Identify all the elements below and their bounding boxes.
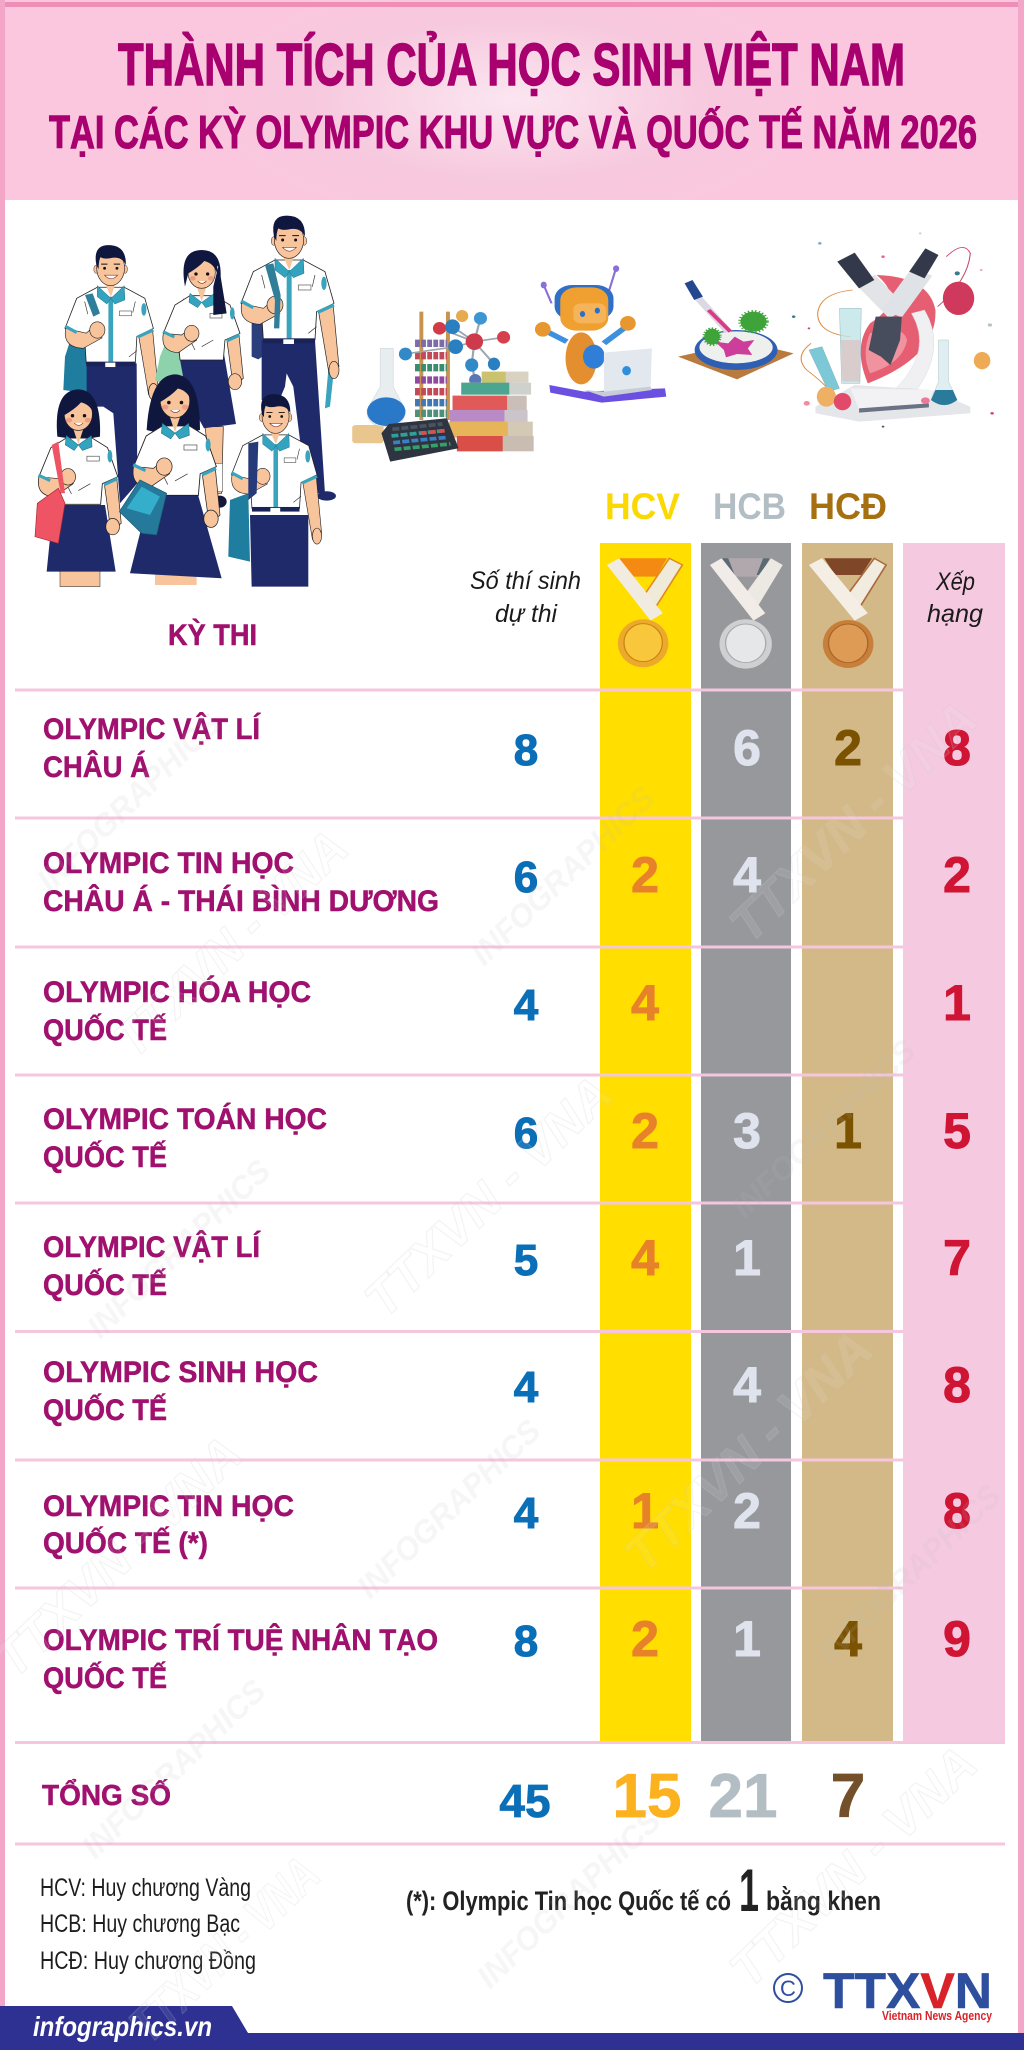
footnote: (*): Olympic Tin học Quốc tế có: [406, 1886, 731, 1916]
row: Olympic Toán học quốc tế: 3: [733, 1103, 761, 1159]
text: INFOGRAPHICS: [470, 1802, 668, 1995]
title banner: [0, 0, 1024, 200]
legend: medal abbreviations: HCĐ: Huy chương Đồng: [40, 1947, 256, 1975]
text: INFOGRAPHICS: [725, 1032, 923, 1225]
medal icons: [607, 558, 886, 669]
footer band with site name: infographics.vn: [33, 2011, 212, 2042]
row: Olympic Tin học châu Á - Thái Bình Dương: 2: [631, 847, 659, 903]
column header: rank: Xếp: [935, 568, 975, 596]
row: Olympic Hóa học quốc tế: QUỐC TẾ: [43, 1013, 167, 1047]
icon: bronze medal: [809, 558, 886, 668]
icon: petri dish and dropper: [678, 280, 794, 379]
student: girl front middle: [119, 374, 222, 585]
text: TTXVN - VNA: [104, 819, 358, 1068]
row: Olympic Trí tuệ nhân tạo quốc tế: 4: [834, 1611, 862, 1667]
footnote: 1: [739, 1857, 759, 1924]
row: Olympic Vật lí quốc tế: OLYMPIC VẬT LÍ: [43, 1230, 261, 1264]
row: Olympic Hóa học quốc tế: 4: [514, 981, 539, 1030]
column: gold medals background: [600, 543, 691, 1741]
text: INFOGRAPHICS: [350, 1412, 548, 1605]
illustrations: science subjects: [352, 232, 994, 462]
illustration: students group: [35, 216, 339, 587]
text: TTXVN - VNA: [354, 1065, 623, 1328]
row: Olympic Vật lí quốc tế: 7: [943, 1230, 971, 1286]
row: Olympic Toán học quốc tế: 6: [514, 1109, 538, 1158]
row: totals: 15: [613, 1762, 681, 1831]
row: Olympic Trí tuệ nhân tạo quốc tế: OLYMPIC TRÍ TUỆ NHÂN TẠO: [43, 1623, 438, 1657]
row: Olympic Vật lí châu Á: 8: [514, 726, 538, 775]
row: Olympic Toán học quốc tế: QUỐC TẾ: [43, 1140, 167, 1174]
column header: rank: hạng: [927, 600, 983, 628]
text: TTXVN - VNA: [119, 1846, 330, 2050]
text: INFOGRAPHICS: [810, 1477, 1008, 1670]
column: bronze medals background: [802, 543, 893, 1741]
row: totals: 21: [709, 1762, 777, 1831]
text: TTXVN - VNA: [719, 1735, 988, 1998]
row: Olympic Tin học châu Á - Thái Bình Dương: OLYMPIC TIN HỌC: [43, 847, 294, 880]
row: Olympic Tin học quốc tế: OLYMPIC TIN HỌC: [43, 1490, 294, 1523]
row: Olympic Tin học quốc tế: 4: [514, 1489, 539, 1538]
row: Olympic Trí tuệ nhân tạo quốc tế: [43, 1611, 971, 1695]
row: Olympic Hóa học quốc tế: OLYMPIC HÓA HỌC: [43, 975, 311, 1009]
column: ranking background: [903, 543, 1005, 1744]
student: girl back middle: [155, 250, 243, 508]
row: Olympic Hóa học quốc tế: 1: [943, 975, 971, 1031]
row: Olympic Tin học quốc tế: 2: [733, 1483, 761, 1539]
row: Olympic Sinh học quốc tế: 8: [943, 1357, 971, 1413]
heading: medal abbreviations: [605, 486, 887, 527]
row: Olympic Hóa học quốc tế: 4: [631, 975, 659, 1031]
row: Olympic Toán học quốc tế: [43, 1102, 971, 1174]
row: Olympic Toán học quốc tế: OLYMPIC TOÁN HỌC: [43, 1102, 327, 1136]
row: Olympic Sinh học quốc tế: OLYMPIC SINH HỌC: [43, 1356, 318, 1389]
footnote: bằng khen: [766, 1885, 881, 1916]
row: Olympic Sinh học quốc tế: 4: [733, 1357, 761, 1413]
row: Olympic Hóa học quốc tế: [43, 975, 971, 1047]
row: Olympic Vật lí châu Á: 8: [943, 720, 971, 776]
row: Olympic Vật lí quốc tế: 1: [733, 1230, 761, 1286]
row: Olympic Sinh học quốc tế: QUỐC TẾ: [43, 1393, 167, 1427]
icon: silver medal: [710, 558, 783, 669]
row: Olympic Toán học quốc tế: 2: [631, 1103, 659, 1159]
student: girl front left: [35, 389, 121, 587]
footnote: [406, 1857, 881, 1924]
row: Olympic Toán học quốc tế: 5: [943, 1103, 971, 1159]
footer band with site name: [0, 2006, 1024, 2050]
icon: gold medal: [607, 558, 682, 667]
text: INFOGRAPHICS: [464, 779, 662, 972]
row: Olympic Tin học quốc tế: [43, 1483, 971, 1560]
row: Olympic Vật lí quốc tế: 5: [514, 1236, 538, 1285]
row: Olympic Tin học châu Á - Thái Bình Dương: CHÂU Á - THÁI BÌNH DƯƠNG: [43, 884, 439, 918]
row: Olympic Vật lí châu Á: CHÂU Á: [43, 750, 150, 784]
row: Olympic Trí tuệ nhân tạo quốc tế: 9: [943, 1611, 971, 1667]
column header: rank: [927, 568, 983, 628]
text: INFOGRAPHICS: [80, 1152, 278, 1345]
student: tall boy back right: [241, 216, 339, 501]
column header: number of contestants: [470, 567, 581, 628]
row: Olympic Trí tuệ nhân tạo quốc tế: 1: [733, 1611, 761, 1667]
row: Olympic Sinh học quốc tế: [43, 1356, 971, 1427]
row: Olympic Tin học châu Á - Thái Bình Dương: 6: [514, 853, 538, 902]
row: Olympic Vật lí châu Á: 6: [733, 720, 761, 776]
legend: medal abbreviations: HCV: Huy chương Vàng: [40, 1874, 251, 1902]
row: Olympic Trí tuệ nhân tạo quốc tế: 2: [631, 1611, 659, 1667]
logo: TTXVN: Vietnam News Agency: [882, 2008, 993, 2023]
row: Olympic Tin học châu Á - Thái Bình Dương: [43, 847, 971, 918]
row: Olympic Tin học châu Á - Thái Bình Dương: 2: [943, 847, 971, 903]
logo: TTXVN: C: [780, 1976, 796, 2001]
label: HCB: HCB: [713, 486, 786, 527]
row: Olympic Vật lí châu Á: [43, 712, 971, 784]
icon: robot with laptop: [535, 265, 666, 403]
student: boy back left: [63, 245, 158, 503]
text: TTXVN - VNA: [614, 1320, 883, 1583]
column header: number of contestants: Số thí sinh: [470, 567, 581, 595]
row: totals: TỔNG SỐ: [42, 1778, 171, 1812]
text: INFOGRAPHICS: [75, 1672, 273, 1865]
row: Olympic Tin học châu Á - Thái Bình Dương: 4: [733, 847, 761, 903]
row: totals: 45: [499, 1775, 551, 1827]
row: Olympic Vật lí quốc tế: [43, 1230, 971, 1302]
row: Olympic Tin học quốc tế: 8: [943, 1483, 971, 1539]
column header: number of contestants: dự thi: [495, 600, 558, 628]
row: Olympic Tin học quốc tế: QUỐC TẾ (*): [43, 1526, 208, 1560]
student: boy front right: [228, 394, 322, 587]
column header: exam: KỲ THI: [168, 618, 257, 652]
row: Olympic Vật lí quốc tế: 4: [631, 1230, 659, 1286]
icon: maths and chemistry objects: [352, 310, 534, 462]
row: Olympic Trí tuệ nhân tạo quốc tế: 8: [514, 1617, 538, 1666]
row: Olympic Trí tuệ nhân tạo quốc tế: QUỐC TẾ: [43, 1661, 167, 1695]
column: silver medals background: [701, 543, 791, 1741]
logo: TTXVN: TTXVN: [823, 1963, 992, 2019]
row: totals: 7: [831, 1762, 865, 1831]
row: Olympic Sinh học quốc tế: 4: [514, 1363, 539, 1412]
row: totals: [42, 1762, 865, 1831]
label: HCĐ: HCĐ: [809, 486, 887, 527]
row: Olympic Vật lí châu Á: 2: [834, 720, 862, 776]
legend: medal abbreviations: [40, 1874, 256, 1975]
icon: microscope: [792, 232, 994, 428]
label: HCV: HCV: [605, 486, 680, 527]
row: Olympic Vật lí quốc tế: QUỐC TẾ: [43, 1268, 167, 1302]
text: INFOGRAPHICS: [30, 705, 228, 898]
row: Olympic Tin học quốc tế: 1: [631, 1483, 659, 1539]
row: Olympic Toán học quốc tế: 1: [834, 1103, 862, 1159]
row: Olympic Vật lí châu Á: OLYMPIC VẬT LÍ: [43, 712, 261, 746]
legend: medal abbreviations: HCB: Huy chương Bạc: [40, 1910, 240, 1938]
text: TTXVN - VNA: [719, 690, 988, 953]
